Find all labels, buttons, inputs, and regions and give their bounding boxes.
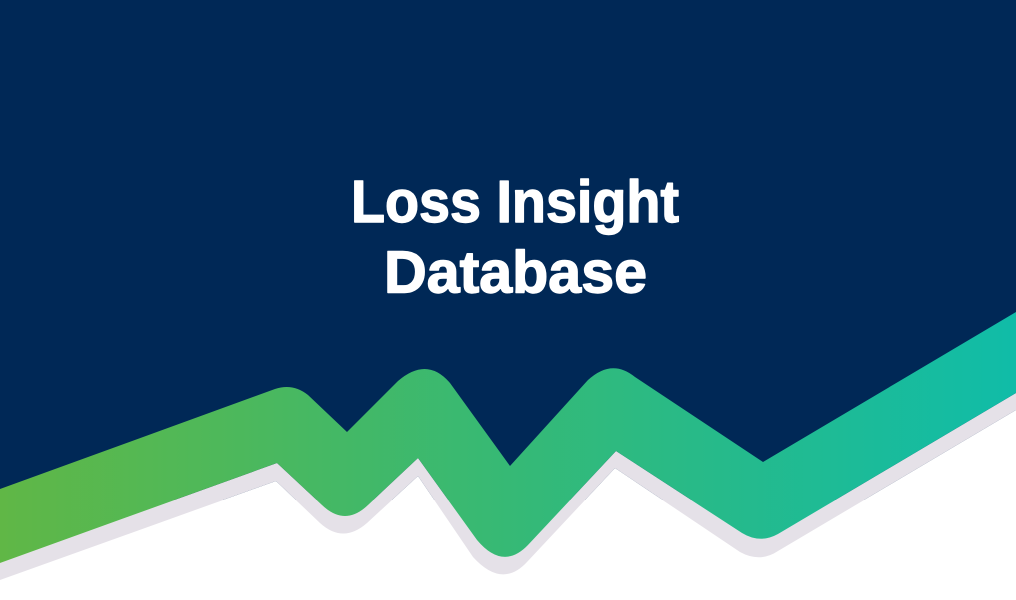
title line 1: Loss Insight: [351, 169, 679, 235]
title line 2: Database: [384, 240, 647, 306]
white area below the line: [0, 410, 1016, 600]
line chart gradient band: [0, 312, 1016, 563]
title: [351, 169, 679, 306]
line chart shadow: [0, 393, 1016, 580]
